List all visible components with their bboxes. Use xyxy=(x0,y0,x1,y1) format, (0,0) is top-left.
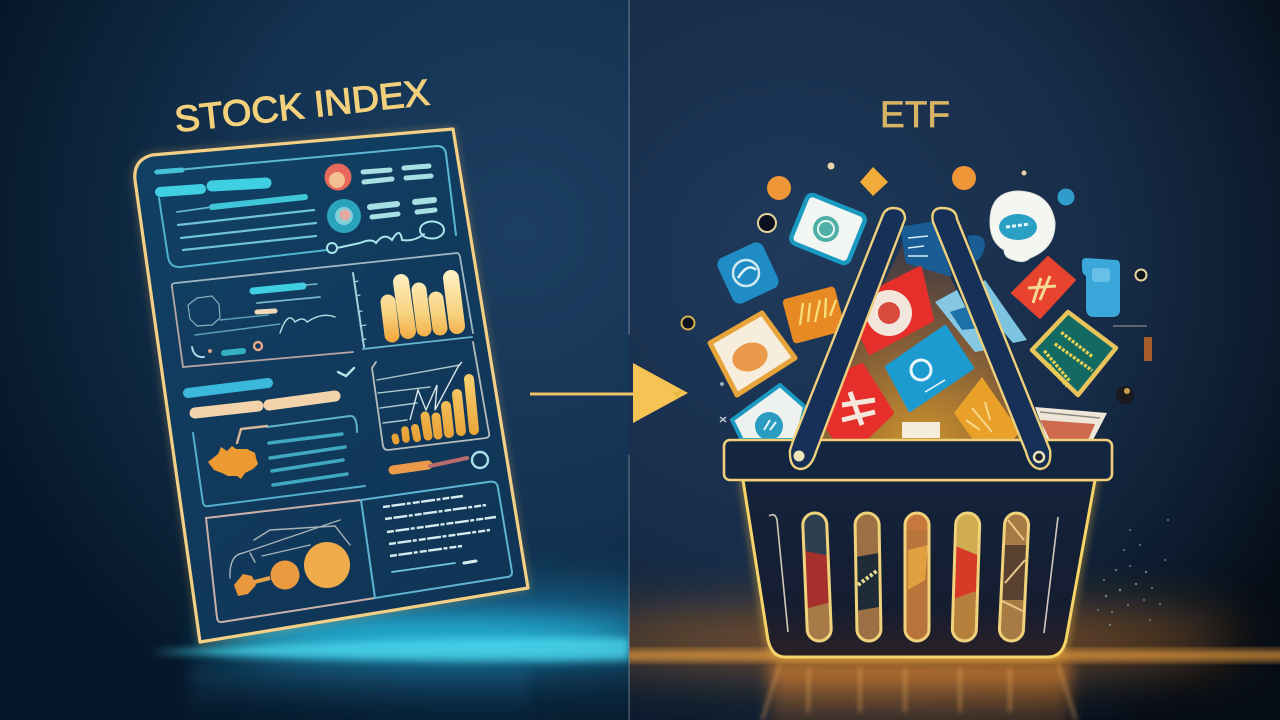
background: right navy panel xyxy=(629,0,1280,720)
icon: orange burst xyxy=(208,446,258,479)
tile: small white note xyxy=(902,422,940,438)
tile: green with gold text xyxy=(1032,312,1116,395)
thin side line: left xyxy=(769,515,788,632)
tile: cream with orange icon xyxy=(710,313,795,395)
basket slot 3 xyxy=(904,512,930,642)
chart trend line xyxy=(410,362,462,420)
icon: check mark xyxy=(338,368,354,376)
basket slot 5 xyxy=(998,512,1030,642)
tile: red with white circle xyxy=(860,268,932,353)
tile: cyan block xyxy=(1082,258,1120,317)
section: pills xyxy=(188,383,488,470)
title: stock index: STOCK INDEX xyxy=(172,72,431,140)
tile: blue center xyxy=(887,327,972,410)
particles: sparkling dust beside basket xyxy=(1097,519,1169,626)
orange floor glow xyxy=(560,616,1280,720)
divider: vertical line lower xyxy=(628,455,630,720)
tile: gold xyxy=(954,377,1020,440)
section: top summary xyxy=(155,146,456,267)
tile: papers xyxy=(1035,407,1107,440)
basket slot 4 xyxy=(950,512,982,642)
basket handle: left xyxy=(790,208,905,469)
icon: blue circle xyxy=(327,199,361,233)
tile: navy chart xyxy=(902,223,985,275)
background: left navy panel xyxy=(0,0,629,720)
handle pin: left xyxy=(794,450,804,462)
basket handle: right xyxy=(932,208,1050,469)
icon: red circle xyxy=(324,164,352,190)
handle pin: right xyxy=(1034,452,1044,462)
basket slot 2 xyxy=(854,512,882,642)
tile: white with teal badge xyxy=(790,193,866,265)
icon: orange circles xyxy=(234,542,350,596)
bar chart: yellow bars xyxy=(388,278,457,335)
tile: red tag xyxy=(1012,257,1075,318)
divider: vertical line upper xyxy=(628,0,630,335)
basket slot 1 xyxy=(801,512,833,642)
document panel: stock index sheet xyxy=(135,129,528,642)
section: bottom bubble panel xyxy=(206,482,512,622)
tile: speech bubble xyxy=(990,191,1055,262)
thin side line: right xyxy=(1044,517,1058,633)
document outer glow xyxy=(135,129,528,642)
basket body xyxy=(743,480,1095,657)
basket xyxy=(724,208,1112,657)
arrow: stock index to ETF xyxy=(530,363,688,423)
tile: orange tag xyxy=(782,286,846,344)
tile: white with teal circle xyxy=(732,385,805,440)
basket floor edge highlight xyxy=(778,654,1056,658)
section: trend chart panel xyxy=(372,342,489,450)
section: bar chart panel xyxy=(172,253,473,367)
document body xyxy=(135,129,528,642)
product tiles: rear xyxy=(710,191,1120,440)
bar chart: orange rising bars xyxy=(395,379,474,441)
orbs and small items above basket xyxy=(672,162,1152,422)
basket interior: warm triangle between handles xyxy=(806,225,1030,442)
title: ETF: ETF xyxy=(880,94,950,135)
tile: blue swirl xyxy=(715,240,781,306)
cyan floor glow xyxy=(150,592,720,720)
tile: light blue strips xyxy=(935,280,1027,352)
basket body glow xyxy=(743,480,1095,657)
section: text list with burst xyxy=(193,416,365,506)
tile: red bottom xyxy=(827,365,892,438)
basket rim xyxy=(724,440,1112,480)
